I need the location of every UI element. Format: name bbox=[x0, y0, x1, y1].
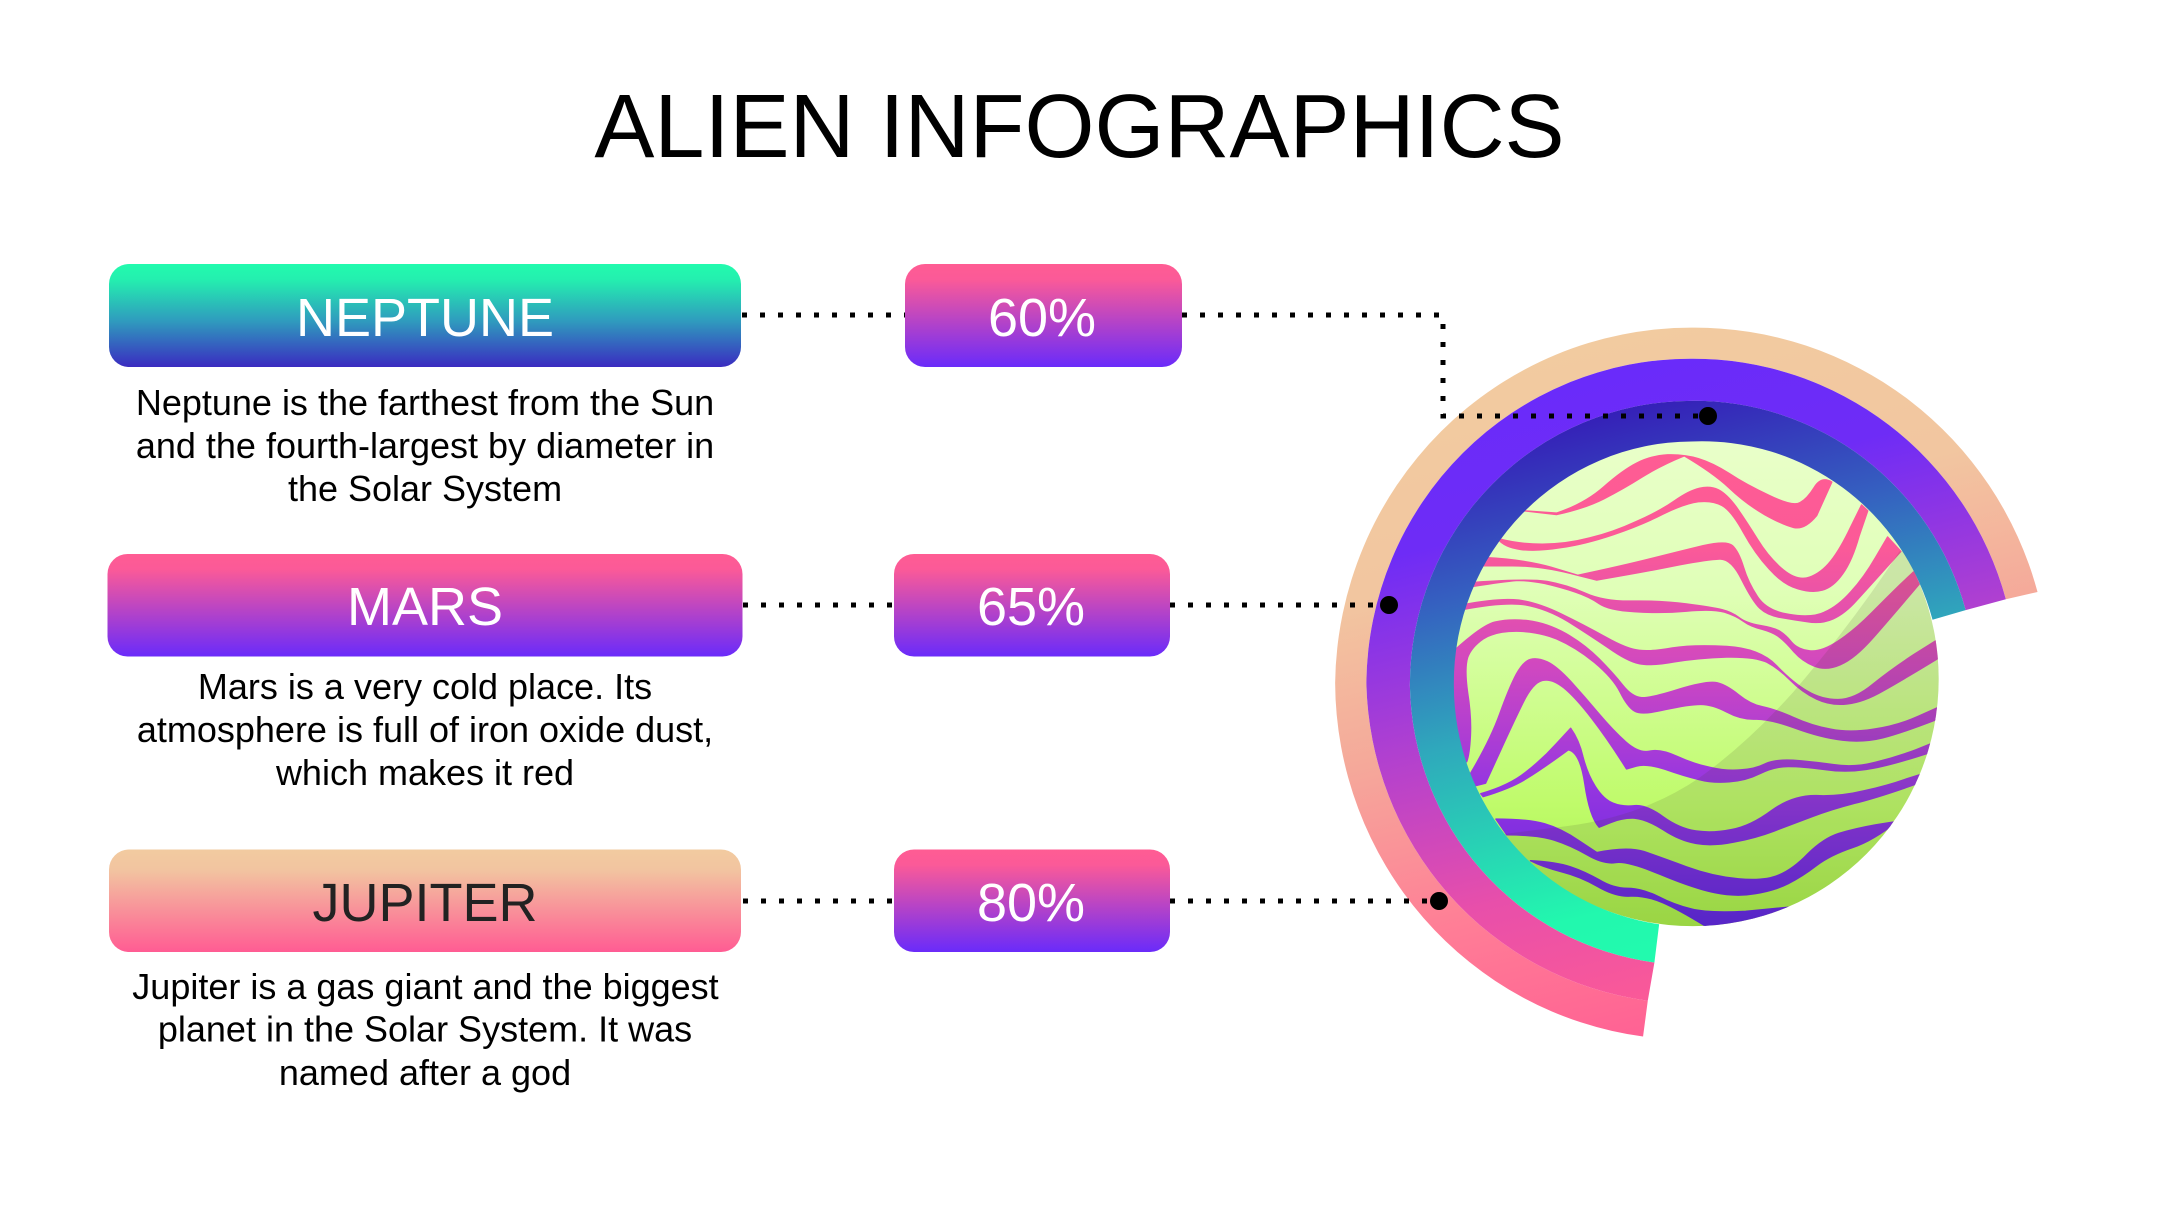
Neptune description: the Solar System bbox=[288, 468, 562, 509]
marker: Mars bbox=[1380, 596, 1398, 614]
Neptune description: Neptune is the farthest from the Sun bbox=[136, 382, 714, 423]
planet shadow bbox=[1490, 551, 1954, 941]
Jupiter description: planet in the Solar System. It was bbox=[158, 1008, 692, 1050]
Mars label bbox=[108, 554, 742, 656]
Mars description: which makes it red bbox=[275, 752, 574, 793]
planet with radial progress rings bbox=[1335, 328, 2038, 1037]
Jupiter percentage bbox=[894, 850, 1170, 952]
panel: Neptune bbox=[109, 264, 1182, 509]
Neptune percentage bbox=[905, 264, 1182, 367]
Mars percentage bbox=[894, 554, 1170, 656]
Mars description: atmosphere is full of iron oxide dust, bbox=[137, 709, 713, 750]
Jupiter description: Jupiter is a gas giant and the biggest bbox=[132, 966, 719, 1007]
connector: Jupiter bbox=[743, 898, 1436, 904]
Jupiter label: JUPITER bbox=[312, 873, 538, 933]
Neptune label bbox=[109, 264, 741, 367]
Jupiter label bbox=[109, 850, 741, 952]
ring: Neptune 60% bbox=[1410, 401, 1966, 962]
Mars percentage: 65% bbox=[977, 577, 1085, 637]
marker: Jupiter bbox=[1430, 892, 1448, 910]
Mars label: MARS bbox=[347, 577, 503, 637]
connector: Neptune bbox=[742, 315, 1705, 416]
Jupiter description: named after a god bbox=[279, 1052, 571, 1093]
marker: Neptune bbox=[1699, 407, 1717, 425]
Jupiter percentage: 80% bbox=[977, 873, 1085, 933]
Neptune description: and the fourth-largest by diameter in bbox=[136, 425, 714, 466]
Mars description: Mars is a very cold place. Its bbox=[198, 666, 652, 707]
title: ALIEN INFOGRAPHICS bbox=[594, 77, 1565, 177]
connector: Mars bbox=[743, 602, 1386, 608]
panel: Jupiter bbox=[109, 850, 1170, 1093]
panel: Mars bbox=[108, 554, 1170, 793]
Neptune label: NEPTUNE bbox=[296, 288, 554, 348]
ring: Mars 65% bbox=[1366, 359, 2006, 1001]
Neptune percentage: 60% bbox=[988, 288, 1096, 348]
ring: Jupiter 80% bbox=[1335, 328, 2038, 1037]
planet globe bbox=[1444, 430, 1954, 941]
